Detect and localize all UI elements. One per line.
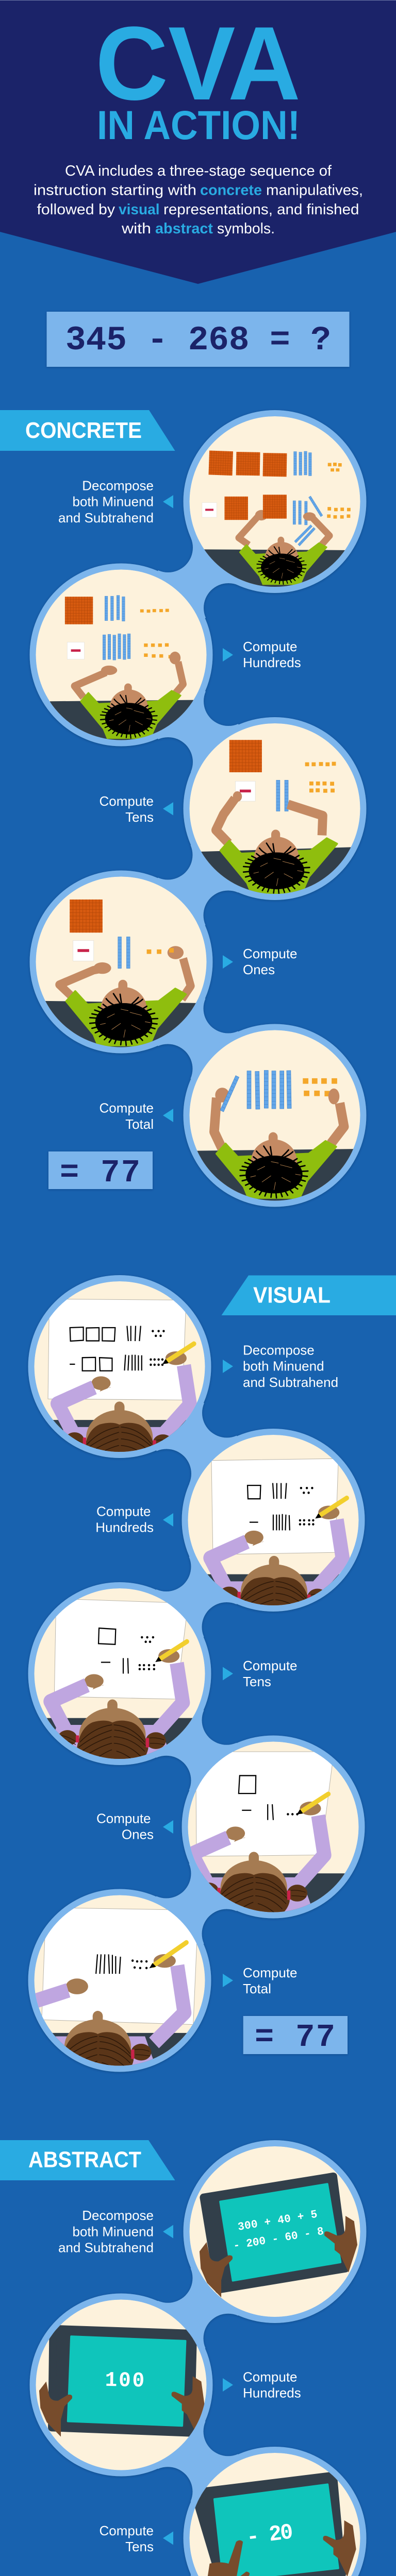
- visual step 4 label: Compute: [96, 1810, 151, 1826]
- intro paragraph: symbols.: [217, 221, 275, 237]
- intro paragraph: followed by: [37, 201, 116, 218]
- banner: visual: VISUAL: [253, 1283, 331, 1308]
- banner: abstract: ABSTRACT: [28, 2147, 141, 2173]
- intro paragraph: [34, 163, 363, 237]
- concrete step 1 scene: [190, 416, 360, 587]
- concrete step 5 label: Total: [125, 1116, 154, 1132]
- arrow: [163, 1820, 173, 1834]
- abstract step 1 label: Decompose: [82, 2208, 154, 2223]
- visual step 4 scene: [188, 1741, 359, 1912]
- arrow: [163, 2225, 173, 2238]
- abstract step 3 label: Compute: [99, 2523, 154, 2538]
- equation box: 345 - 268 = ?: [65, 321, 331, 360]
- concrete step 3 scene: [190, 723, 360, 894]
- visual step 3 label: Compute: [243, 1658, 297, 1673]
- answer box concrete: = 77: [60, 1155, 140, 1191]
- intro paragraph: instruction starting with: [34, 182, 196, 199]
- abstract step 1 label: both Minuend: [72, 2224, 154, 2239]
- arrow: [223, 955, 233, 969]
- abstract step 3 label: Tens: [125, 2539, 154, 2554]
- concrete step 3 label: [99, 793, 154, 825]
- visual step 2 label: Hundreds: [95, 1520, 154, 1535]
- visual step 2 scene: [188, 1435, 359, 1605]
- concrete step 2 scene: [36, 570, 206, 740]
- abstract step 2 scene: [36, 2300, 206, 2470]
- equation box: [46, 312, 350, 367]
- visual step 1 label: Decompose: [243, 1343, 315, 1358]
- visual step 2 label: [95, 1503, 154, 1535]
- arrow: [223, 2378, 233, 2392]
- visual step 4 label: Ones: [122, 1826, 154, 1842]
- concrete step 2 label: [243, 639, 301, 670]
- concrete step 4 scene: [36, 877, 206, 1047]
- concrete step 4 label: Compute: [243, 946, 297, 961]
- intro paragraph: manipulatives,: [266, 182, 363, 199]
- concrete step 3 label: Compute: [99, 793, 154, 809]
- visual step 5 scene: [34, 1895, 205, 2066]
- arrow: [223, 648, 233, 662]
- banner: concrete: CONCRETE: [25, 418, 142, 443]
- concrete step 4 label: Ones: [243, 962, 275, 977]
- concrete step 4 label: [243, 946, 297, 977]
- visual step 5 label: [243, 1965, 297, 1996]
- visual step 2 label: Compute: [96, 1503, 151, 1519]
- visual step 1 label: [243, 1343, 338, 1390]
- concrete step 5 label: [99, 1100, 154, 1132]
- abstract connected circles: [30, 2140, 366, 2576]
- banner: visual: [222, 1276, 396, 1315]
- abstract step 2 label: Hundreds: [243, 2385, 301, 2401]
- visual step 1 label: and Subtrahend: [243, 1375, 338, 1390]
- abstract step 2 scene: 100: [105, 2369, 144, 2394]
- banner: abstract: [0, 2140, 175, 2180]
- visual step 3 label: [243, 1658, 297, 1689]
- arrow: [223, 1974, 233, 1987]
- arrow: [163, 2532, 173, 2545]
- abstract step 1 scene: [190, 2146, 360, 2317]
- arrow: [163, 495, 173, 508]
- arrow: [223, 1667, 233, 1681]
- visual step 5 label: Compute: [243, 1965, 297, 1980]
- concrete connected circles: [30, 410, 366, 1207]
- abstract step 3 scene: [190, 2453, 360, 2576]
- concrete step 1 label: Decompose: [82, 478, 154, 494]
- abstract step 1 label: and Subtrahend: [58, 2240, 154, 2255]
- arrow: [163, 802, 173, 815]
- concrete step 1 label: both Minuend: [72, 494, 154, 510]
- visual step 1 label: both Minuend: [243, 1359, 324, 1374]
- visual step 4 label: [96, 1810, 154, 1842]
- concrete step 1 label: and Subtrahend: [58, 510, 154, 526]
- abstract step 2 label: [243, 2369, 301, 2401]
- intro paragraph: with: [121, 221, 151, 237]
- answer box visual: = 77: [255, 2019, 335, 2056]
- abstract step 3 scene: - 20: [245, 2519, 294, 2551]
- abstract step 1 scene: - 200 - 60 - 8: [233, 2225, 325, 2252]
- arrow: [163, 1513, 173, 1527]
- banner: concrete: [0, 410, 175, 451]
- concrete step 3 label: Tens: [125, 809, 154, 825]
- intro paragraph: CVA includes a three-stage sequence of: [65, 163, 332, 179]
- concrete step 2 label: Hundreds: [243, 655, 301, 670]
- intro paragraph: visual: [119, 201, 160, 218]
- visual step 1 scene: [34, 1281, 205, 1452]
- visual step 3 scene: [33, 1588, 205, 1771]
- visual connected circles: [28, 1275, 365, 2072]
- concrete step 2 label: Compute: [243, 639, 297, 654]
- intro paragraph: representations, and finished: [163, 201, 359, 218]
- title: CVA: CVA: [95, 5, 301, 122]
- arrow: [163, 1109, 173, 1122]
- concrete step 1 label: [58, 478, 154, 526]
- header band: [0, 0, 396, 284]
- arrow: [223, 1360, 233, 1373]
- visual step 3 label: Tens: [243, 1674, 271, 1689]
- concrete step 5 scene: [190, 1030, 360, 1200]
- intro paragraph: abstract: [155, 221, 213, 237]
- abstract step 3 label: [99, 2523, 154, 2554]
- visual step 5 label: Total: [243, 1981, 271, 1996]
- abstract step 1 label: [58, 2208, 154, 2255]
- abstract step 1 scene: 300 + 40 + 5: [237, 2208, 318, 2234]
- concrete step 5 label: Compute: [99, 1100, 154, 1116]
- abstract step 2 label: Compute: [243, 2369, 297, 2384]
- title: in action: IN ACTION!: [97, 102, 300, 148]
- intro paragraph: concrete: [200, 182, 262, 199]
